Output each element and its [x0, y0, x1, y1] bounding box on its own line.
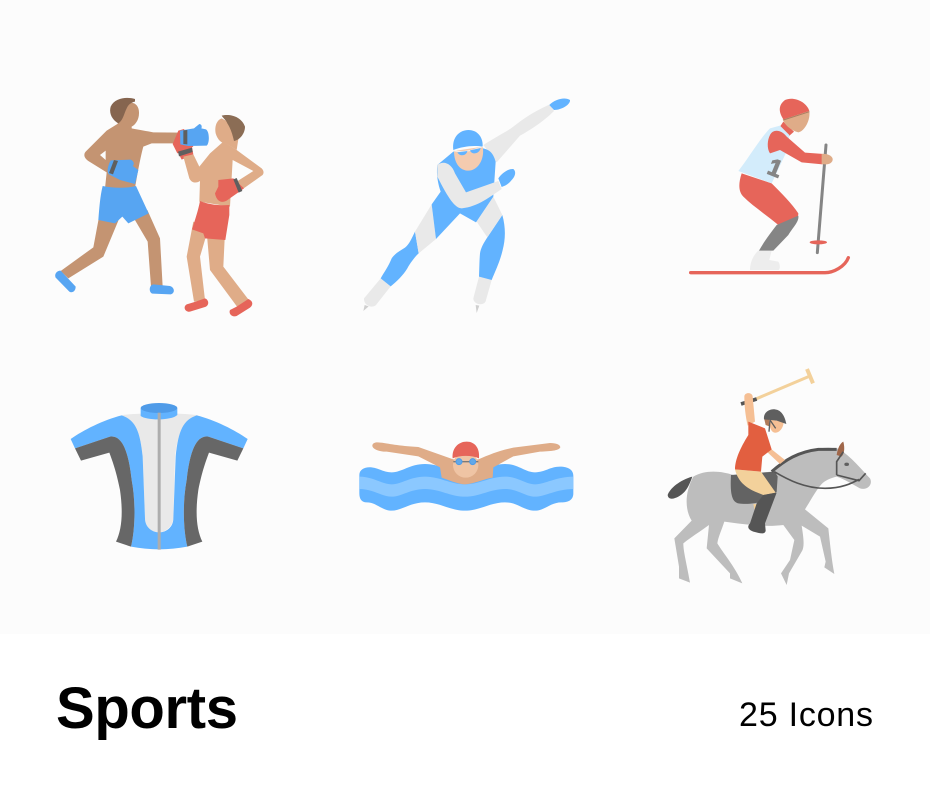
icon count: 25 Icons [739, 696, 873, 734]
collar [141, 403, 177, 419]
title: Sports [56, 676, 238, 741]
red boxer [183, 115, 264, 316]
icon: boxers [55, 98, 264, 316]
skates [363, 277, 492, 313]
icon: speed skater [363, 98, 570, 313]
head [453, 442, 479, 478]
zipper [158, 413, 161, 550]
icon: skier [691, 99, 848, 273]
body and arms [372, 442, 560, 484]
bent arm [437, 163, 502, 208]
head [453, 130, 483, 171]
jersey [735, 422, 772, 472]
icon: cycling jersey [71, 403, 248, 550]
hand [498, 169, 515, 187]
trousers [739, 173, 798, 225]
raised arm [483, 104, 554, 162]
raised hand [549, 98, 570, 110]
raised arm [744, 393, 755, 426]
centre panel [122, 413, 198, 532]
head and helmet [764, 409, 786, 433]
forearm [765, 449, 785, 464]
left side [71, 415, 159, 549]
icon: swimmer [359, 442, 573, 511]
rider leg [735, 469, 777, 533]
neck [780, 122, 794, 137]
ski [691, 258, 848, 273]
horse body [674, 448, 871, 585]
water [359, 464, 573, 511]
bib number: 1 [764, 154, 786, 184]
water highlight [359, 477, 573, 497]
polo mallet [741, 369, 813, 404]
horse ear [837, 442, 844, 457]
saddle [731, 472, 778, 504]
hand [822, 154, 833, 164]
blue boxer [55, 98, 209, 294]
right side [159, 415, 248, 549]
boot [750, 251, 780, 270]
race bib [738, 126, 789, 183]
head and helmet [780, 99, 809, 132]
icon: polo player [668, 369, 871, 585]
ski pole [810, 145, 827, 253]
arm [768, 131, 824, 164]
horse eye [844, 463, 849, 466]
suit legs [381, 197, 505, 286]
reins and bridle [772, 449, 866, 488]
lower leg [759, 216, 798, 251]
horse tail [668, 477, 692, 499]
torso [432, 148, 496, 239]
